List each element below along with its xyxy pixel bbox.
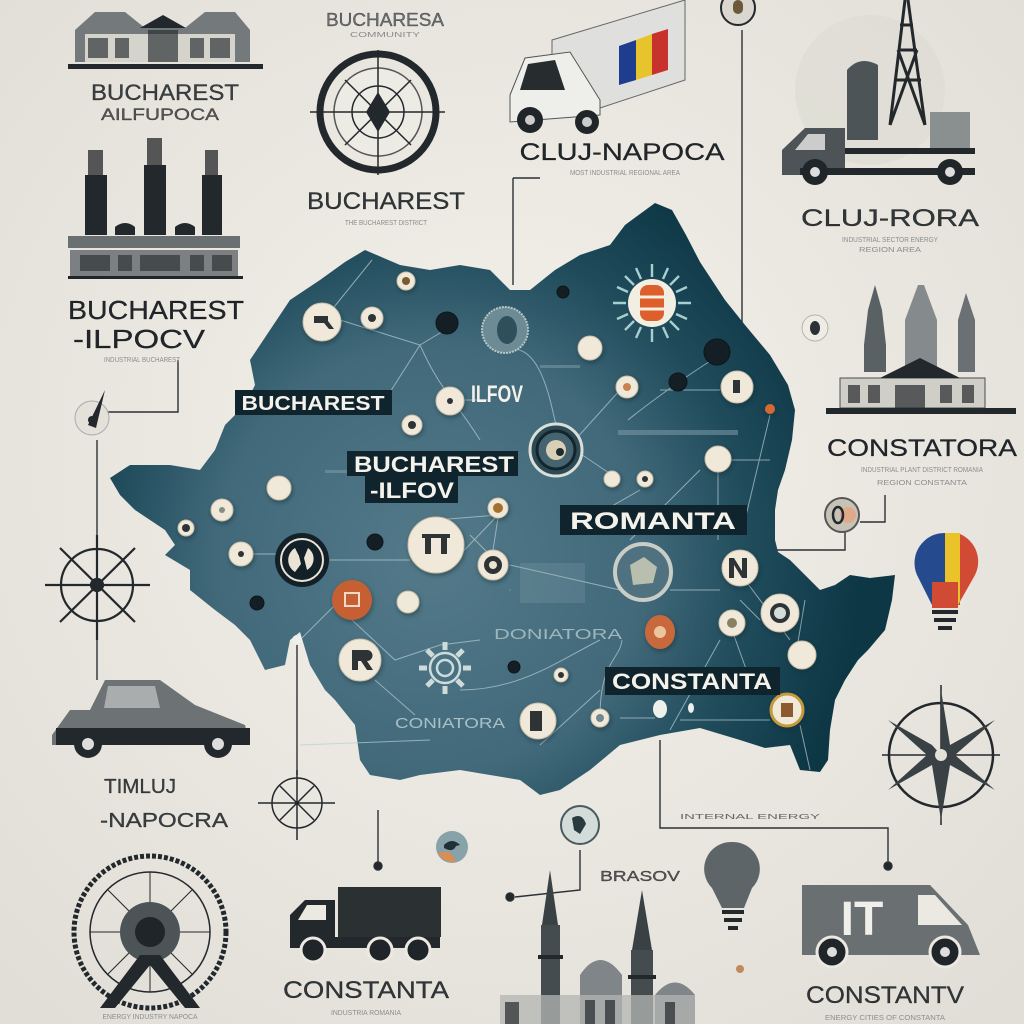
label: Doniatora: DONIATORA bbox=[494, 626, 622, 643]
small caption internal energy: INTERNAL ENERGY bbox=[680, 814, 821, 821]
heading: Constatora: CONSTATORA bbox=[827, 435, 1017, 462]
icon: IT van: IT bbox=[841, 893, 883, 946]
small caption Constantv: ENERGY CITIES OF CONSTANTA bbox=[825, 1015, 945, 1022]
icon: compass star bbox=[882, 685, 1000, 825]
dotted texture patch bbox=[520, 563, 585, 603]
heading: Constantv: CONSTANTV bbox=[806, 982, 964, 1009]
icon: circle marker bbox=[825, 498, 859, 532]
icon: top-left building bbox=[68, 12, 263, 69]
text: Ailfuoca: AILFUPOCA bbox=[101, 105, 220, 124]
small caption Cluj-Rora: INDUSTRIAL SECTOR ENERGY bbox=[842, 237, 938, 244]
node glyphs bbox=[182, 277, 793, 731]
small caption Constatora: REGION CONSTANTA bbox=[877, 480, 967, 487]
icon: bottom pin bbox=[561, 806, 599, 844]
icon: light bulb bbox=[704, 842, 760, 928]
label: Constanta bbox=[605, 667, 780, 695]
icon: compass needle bbox=[75, 390, 109, 435]
dark nodes bbox=[250, 286, 730, 673]
small caption Cluj-Rora: REGION AREA bbox=[859, 247, 921, 254]
heading: Brasov: BRASOV bbox=[600, 868, 680, 885]
small caption Cluj-Rora bbox=[842, 237, 938, 254]
label: Romanta bbox=[560, 505, 747, 535]
icon: delivery truck bbox=[290, 887, 441, 962]
heading: Timluj -Napocra: -NAPOCRA bbox=[100, 810, 229, 832]
heading: Bucharesa: BUCHARESA bbox=[326, 10, 444, 30]
heading: Cluj-Napoca: CLUJ-NAPOCA bbox=[520, 139, 724, 166]
connector lines outside the map bbox=[97, 30, 892, 901]
icon: mosque towers bbox=[500, 870, 695, 1024]
heading: Bucharest -Ilpocv: BUCHAREST bbox=[68, 295, 244, 325]
icon: truck with tower bbox=[782, 0, 975, 185]
small caption Constanta: INDUSTRIA ROMANIA bbox=[331, 1010, 401, 1017]
heading: Timluj -Napocra: TIMLUJ bbox=[104, 776, 176, 798]
heading: Bucharest -Ilpocv: -ILPOCV bbox=[73, 324, 206, 354]
cream nodes bbox=[178, 272, 816, 739]
label: Bucharest Ilfov bbox=[347, 451, 518, 503]
small caption centre: THE BUCHAREST DISTRICT bbox=[345, 220, 428, 227]
icon: ship wheel bbox=[45, 535, 150, 640]
node: ring centre bbox=[530, 424, 582, 476]
map shape bbox=[110, 203, 895, 795]
small caption Cluj: MOST INDUSTRIAL REGIONAL AREA bbox=[570, 170, 680, 177]
label: Constanta: CONSTANTA bbox=[612, 669, 772, 694]
label: Romanta: ROMANTA bbox=[570, 508, 736, 535]
network links bbox=[241, 260, 810, 770]
icon: ferris wheel bbox=[74, 856, 226, 1008]
node: seal bbox=[482, 307, 528, 353]
heading: Cluj-Rora: CLUJ-RORA bbox=[801, 205, 979, 232]
node: large dark badge bbox=[275, 533, 329, 587]
node: grey ring bbox=[615, 544, 671, 600]
icon: building with towers bbox=[826, 285, 1016, 414]
label: Coniatora: CONIATORA bbox=[395, 715, 505, 732]
icon: chimneys factory bbox=[68, 138, 243, 279]
icon: IT van bbox=[802, 885, 980, 967]
map of Romania bbox=[110, 203, 895, 795]
icon: compass rose bbox=[310, 50, 445, 175]
node: orange badges bbox=[332, 404, 775, 649]
label: Ilfov: ILFOV bbox=[471, 381, 523, 408]
small caption top: COMMUNITY bbox=[350, 32, 421, 39]
heading: Timluj -Napocra bbox=[100, 776, 229, 832]
icon: bottom orange ring bbox=[436, 831, 468, 863]
small caption left: INDUSTRIAL BUCHAREST bbox=[104, 357, 181, 364]
node: white pins bbox=[292, 635, 694, 718]
node: gear bbox=[419, 642, 471, 694]
icon: pin top bbox=[721, 0, 755, 25]
icon: car bbox=[52, 680, 250, 758]
small caption bottom left: ENERGY INDUSTRY NAPOCA bbox=[102, 1014, 198, 1021]
node: sun emblem bbox=[613, 264, 691, 342]
label: Bucharest Ilfov: -ILFOV bbox=[370, 478, 454, 503]
label: Bucharest: BUCHAREST bbox=[242, 393, 384, 415]
heading: Bucharest -Ilpocv bbox=[68, 295, 244, 354]
icon: flag truck bbox=[510, 0, 685, 134]
label: Bucharest Ilfov: BUCHAREST bbox=[354, 452, 515, 477]
icon: small node right bbox=[802, 315, 828, 341]
heading: Bucharest top-left: BUCHAREST bbox=[91, 80, 239, 105]
heading: Bucharest centre: BUCHAREST bbox=[307, 188, 465, 215]
heading: Constanta: CONSTANTA bbox=[283, 977, 449, 1004]
icon: crosshair bbox=[258, 770, 335, 840]
small caption Constatora bbox=[861, 467, 983, 487]
icon: flag light bulb bbox=[914, 533, 978, 628]
small caption Constatora: INDUSTRIAL PLANT DISTRICT ROMANIA bbox=[861, 467, 983, 474]
icon: small dot bbox=[736, 965, 744, 973]
faint map marks bbox=[325, 365, 738, 591]
